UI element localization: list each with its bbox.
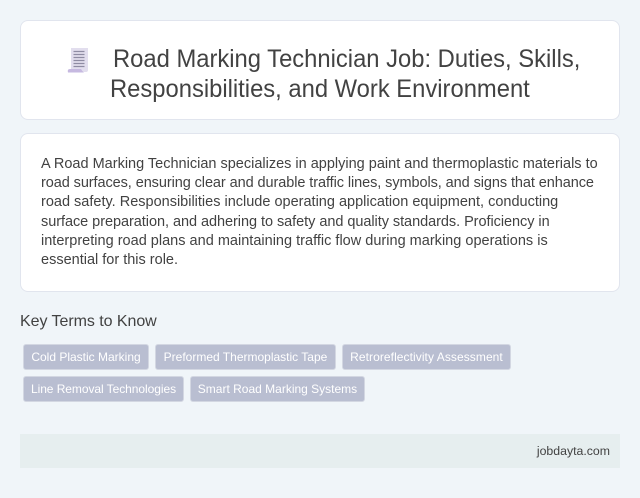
tag: Preformed Thermoplastic Tape: [164, 350, 327, 364]
title: [110, 45, 580, 103]
description text: [41, 156, 598, 268]
title: Road Marking Technician Job: Duties, Skills,: [113, 45, 580, 73]
footer bar: [20, 434, 620, 468]
tag: [155, 344, 336, 370]
tag: Smart Road Marking Systems: [198, 382, 357, 396]
tag: Retroreflectivity Assessment: [350, 350, 503, 364]
tags group: [23, 344, 511, 402]
tag: [342, 344, 511, 370]
heading: key terms: Key Terms to Know: [20, 313, 157, 330]
panel: description card: [20, 133, 620, 292]
description text: road safety. Responsibilities include operating application equipment, conducting: [41, 194, 558, 210]
tag: [23, 376, 184, 402]
tag: Line Removal Technologies: [31, 382, 176, 396]
tag: [23, 344, 149, 370]
tag: Cold Plastic Marking: [31, 350, 141, 364]
icon: document scroll: [68, 48, 88, 72]
footer source: jobdayta.com: [537, 444, 610, 458]
title: Responsibilities, and Work Environment: [110, 75, 530, 103]
description text: interpreting road plans and maintaining traffic flow during marking operations is: [41, 233, 548, 249]
description text: A Road Marking Technician specializes in applying paint and thermoplastic materials to: [41, 156, 598, 172]
description text: essential for this role.: [41, 252, 178, 268]
panel: title card: [20, 20, 620, 120]
tag: [190, 376, 365, 402]
description text: road surfaces, ensuring clear and durable traffic lines, symbols, and signs that enhance: [41, 175, 594, 191]
description text: surface preparation, and adhering to safety and quality standards. Proficiency in: [41, 214, 550, 230]
